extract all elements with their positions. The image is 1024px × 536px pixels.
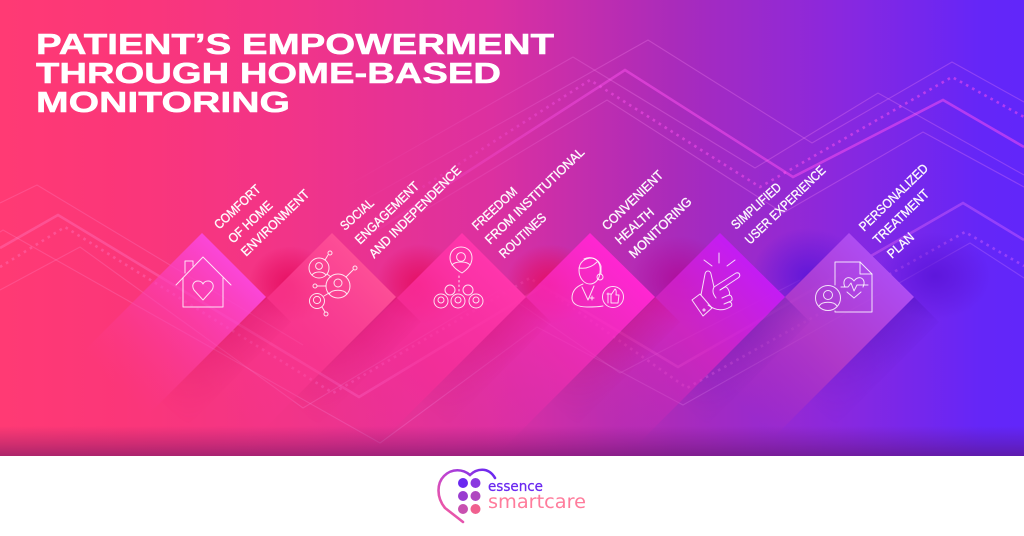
label: simplified user experience: SIMPLIFIED — [728, 180, 784, 232]
logo: essence smartcare: smartcare — [488, 492, 586, 513]
label: simplified user experience — [728, 162, 829, 247]
label: social engagement and independence: SOCIAL — [337, 195, 377, 233]
label: freedom from institutional routines: ROUTINES — [496, 210, 549, 261]
icon: medical document with patient — [816, 262, 872, 312]
label: comfort of home environment — [211, 182, 312, 259]
label: social engagement and independence: AND INDEPENDENCE — [366, 162, 464, 261]
title: MONITORING — [36, 87, 290, 119]
logo dots — [458, 478, 480, 514]
icon: social network of people — [309, 251, 357, 316]
label: personalized treatment plan: TREATMENT — [870, 186, 932, 247]
label: simplified user experience: USER EXPERIENCE — [742, 162, 829, 247]
label: personalized treatment plan — [856, 161, 932, 261]
panel: band 2 — [132, 233, 396, 457]
label: comfort of home environment: OF HOME — [225, 197, 276, 246]
panel: band 6 — [649, 233, 914, 457]
panel: band 4 — [390, 233, 655, 457]
label: convenient health monitoring: HEALTH — [612, 205, 657, 247]
upper zigzag lines — [340, 40, 1024, 254]
logo heart outline — [438, 470, 495, 522]
label: freedom from institutional routines: FROM INSTITUTIONAL — [482, 144, 587, 247]
title — [36, 29, 554, 119]
icon: nurse with headset and thumbs up — [572, 258, 624, 308]
icon: pointing hand — [692, 253, 740, 316]
label: comfort of home environment: COMFORT — [211, 182, 264, 232]
label: personalized treatment plan: PLAN — [884, 229, 917, 261]
label: personalized treatment plan: PERSONALIZED — [856, 161, 931, 234]
panel: band 3 — [262, 233, 526, 457]
title: PATIENT’S EMPOWERMENT — [36, 29, 554, 61]
label: convenient health monitoring: CONVENIENT — [599, 167, 666, 233]
logo: essence smartcare — [438, 470, 586, 522]
label: social engagement and independence: ENGAGEMENT — [352, 178, 422, 247]
label: social engagement and independence — [337, 162, 464, 261]
lower zigzag lines — [0, 185, 1024, 443]
label: convenient health monitoring: MONITORING — [626, 194, 695, 261]
title: THROUGH HOME-BASED — [36, 58, 501, 90]
dark shadow accents behind diamonds — [248, 228, 991, 324]
footer panel — [0, 456, 1024, 536]
label: comfort of home environment: ENVIRONMENT — [238, 186, 312, 259]
panel: band 5 — [520, 233, 785, 457]
label: freedom from institutional routines: FREEDOM — [469, 184, 520, 233]
label: convenient health monitoring — [599, 167, 695, 261]
bottom shadow — [0, 426, 1024, 456]
icon: person pin above group — [434, 247, 483, 308]
panel: band 1 — [2, 233, 266, 437]
icon: house with heart — [176, 257, 231, 307]
logo: essence smartcare: essence — [488, 479, 543, 495]
